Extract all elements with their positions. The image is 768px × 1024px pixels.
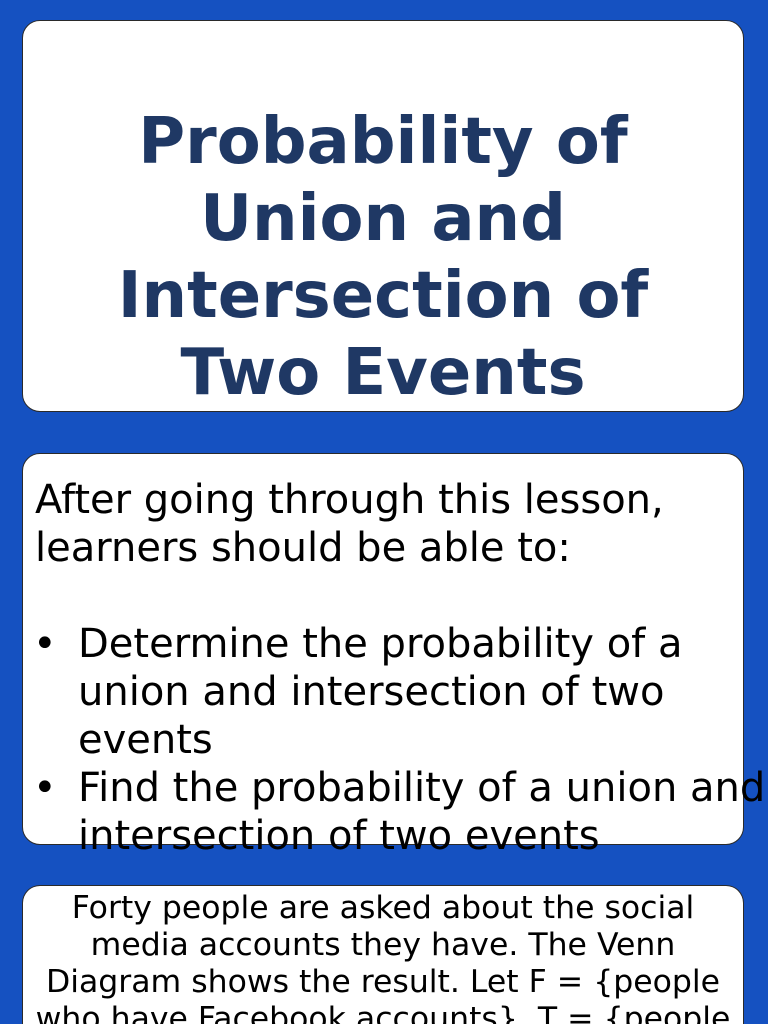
objectives text: Find the probability of a union and xyxy=(78,765,765,811)
objectives text: events xyxy=(78,717,213,763)
objectives text: • xyxy=(33,621,57,667)
objectives text: • xyxy=(33,765,57,811)
objectives text: union and intersection of two xyxy=(78,669,664,715)
objectives text: intersection of two events xyxy=(78,813,600,859)
objectives text: Determine the probability of a xyxy=(78,621,682,667)
objectives text: learners should be able to: xyxy=(35,525,571,571)
panel: problem xyxy=(22,885,744,1024)
objectives text xyxy=(33,477,765,859)
title: Intersection of xyxy=(118,259,648,333)
problem text: media accounts they have. The Venn xyxy=(91,927,675,963)
title xyxy=(118,105,649,410)
problem text: Diagram shows the result. Let F = {people xyxy=(46,964,720,1000)
problem text: Forty people are asked about the social xyxy=(72,890,694,926)
title: Probability of xyxy=(138,105,628,179)
panel: objectives xyxy=(22,453,744,845)
problem text xyxy=(36,890,730,1024)
objectives text: After going through this lesson, xyxy=(35,477,664,523)
panel: title xyxy=(22,20,744,412)
title: Union and xyxy=(200,182,566,256)
title: Two Events xyxy=(180,336,586,410)
